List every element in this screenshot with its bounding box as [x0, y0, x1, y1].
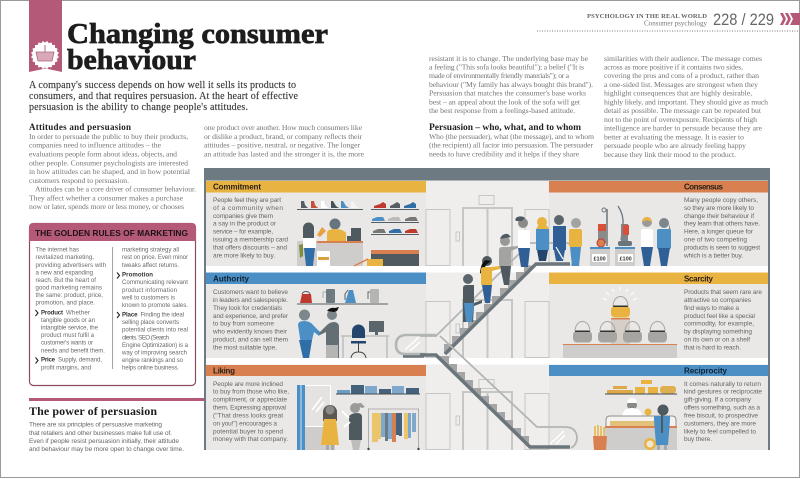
text column 3: a feeling ("This sofa looks beautiful"); a belief ("It is [429, 62, 584, 72]
rules right column [117, 246, 189, 372]
rules left column: promotion, and place. [36, 300, 95, 307]
highlighted yellow kettle [603, 287, 637, 318]
golden rules heading: THE GOLDEN RULES OF MARKETING [35, 228, 188, 238]
text column 4: intelligence are harder to persuade because they are [604, 124, 763, 133]
person in queue 7 [569, 218, 582, 266]
queue person white top [641, 217, 653, 266]
rules right column: Finding the ideal [140, 312, 184, 318]
gift basket [644, 438, 656, 450]
text column 4: covering the pros and cons of a product, rather than [604, 71, 759, 80]
rules right column: helps online business. [122, 365, 179, 372]
cash register [347, 228, 361, 241]
rules left column: Product [41, 309, 63, 316]
text: scarcity: attractive so companies [684, 297, 752, 304]
text: commitment: companies give them [213, 213, 273, 220]
person on escalator 3 [499, 234, 518, 285]
vacuum cleaner on plinth 2: £100 [620, 256, 632, 262]
heading: consensus: Consensus [684, 182, 724, 192]
rules left column: Price [41, 357, 56, 364]
text column 3: best – an appeal about the look of the sofa will get [429, 98, 581, 106]
panel: golden rules of marketing [29, 223, 196, 386]
text column 1: attitudes and persuasion: other people. Consumer psychologists are interested [29, 158, 188, 167]
heading: liking: Liking [213, 366, 235, 376]
text: commitment: that offers discounts – and [213, 244, 287, 252]
rules left column: needs and benefit them. [41, 347, 105, 354]
text column 4: not to the point of overexposure. Recipients of high [604, 115, 757, 124]
heading: scarcity: Scarcity [684, 274, 714, 284]
text column 1: attitudes and persuasion [29, 122, 196, 211]
lower escalator [420, 336, 577, 448]
text column 3: (the recipient) all factor into persuasion. The persuader [429, 141, 593, 150]
intro text: persuasion is the ability to change people's attitudes. [29, 102, 248, 113]
illustration: clothes shop [297, 385, 420, 450]
text: commitment: service – for example, [213, 229, 273, 236]
rules right column: potential clients into real [122, 327, 188, 334]
heading: consensus [549, 181, 768, 192]
text: commitment: issuing a membership card [213, 236, 288, 244]
rules left column: The internet has [36, 246, 79, 254]
text: scarcity [684, 289, 762, 352]
running header: 228 / 229 [713, 10, 774, 29]
text column 1: attitudes and persuasion: Attitudes and persuasion [29, 122, 131, 132]
text column 1: attitudes and persuasion: companies need to influence attitudes – the [29, 141, 162, 150]
rules right column: Promotion [122, 272, 153, 278]
text column 1: attitudes and persuasion: evaluations people form about ideas, objects, and [29, 150, 177, 158]
central lift lobby background [426, 196, 549, 450]
text column 4: a one-sided list. Messages are strongest when they [604, 80, 758, 89]
text: authority: Customers want to believe [213, 289, 288, 296]
rules left column: customer's wants or [41, 340, 93, 347]
text column 3: the best response from a feelings-based attitude. [429, 106, 575, 115]
rules right column: way of improving search [121, 350, 187, 356]
text: reciprocity: likely to feel compelled to [684, 428, 756, 435]
text: consensus: Here, a longer queue for [684, 229, 754, 236]
running header: PSYCHOLOGY IN THE REAL WORLD [587, 13, 707, 20]
text: consensus: one of two competing [684, 236, 747, 244]
text column 3: Persuasion – who, what, and to whom [429, 123, 581, 133]
display table [563, 344, 677, 358]
bakery counter [605, 408, 677, 450]
rules right column: clients. SEO (Search [122, 334, 169, 341]
person on escalator 4 [515, 216, 530, 267]
rules right column: Engine Optimization) is a [122, 342, 189, 349]
text column 3: Persuasion that matches the consumer's base works [429, 89, 586, 98]
rules left column: Whether [66, 309, 90, 316]
rules left column: revitalized marketing, [36, 254, 94, 261]
heading: reciprocity [549, 365, 768, 376]
shop counter [297, 241, 363, 266]
title: behaviour [67, 45, 196, 76]
illustration: kettles on display [563, 287, 677, 358]
rules right column: known to promote sales. [122, 302, 188, 309]
text column 2: or dislike a product, brand, or company reflects their [204, 132, 362, 141]
text: authority: and experience, and prefer [213, 313, 289, 320]
text: authority: They look for credentials [213, 305, 283, 312]
text: commitment [213, 197, 288, 260]
rules left column: Supply, demand, [58, 357, 102, 364]
text: consensus: which is a better buy. [683, 252, 743, 260]
rules left column: the same: product, price, [36, 292, 103, 299]
section: the power of persuasion [29, 398, 204, 453]
title [67, 19, 328, 76]
person in queue 5 [536, 217, 549, 261]
text column 3: made of environmentally friendly materials"); or a [429, 71, 570, 80]
text: commitment: of a community when [213, 205, 283, 212]
person on escalator 1 [463, 274, 482, 322]
text: consensus: they learn that others have. [684, 221, 760, 228]
heading: commitment [206, 181, 426, 192]
clothes rack [367, 409, 420, 450]
upper escalator [396, 243, 577, 356]
text: reciprocity: It comes naturally to return [684, 381, 761, 388]
text: consensus: so they are more likely to [684, 205, 754, 212]
intro text: consumers, and that requires persuasion. At the heart of effective [29, 91, 299, 102]
panel: six principles infographic [204, 168, 770, 450]
text: liking: People are more inclined [213, 381, 283, 388]
rules left column: reach. But the heart of [36, 277, 96, 284]
text column 1: attitudes and persuasion: customers respond to persuasion. [29, 176, 129, 185]
shoe bench [354, 250, 419, 266]
text: authority [212, 289, 289, 352]
running header: Consumer psychology [644, 20, 708, 28]
rules left column: tangible goods or an [41, 317, 95, 324]
illustration: bakery [593, 380, 677, 450]
text: consensus: products is seen to suggest [684, 244, 760, 252]
text column 3 [429, 54, 594, 158]
shopping bag [317, 251, 330, 266]
text: scarcity: commodity, for example, [684, 321, 754, 328]
text: authority: the most suitable type. [213, 344, 277, 352]
customer in blue dress [654, 404, 670, 450]
rules right column: marketing strategy all [122, 246, 179, 254]
text column 3: needs to have credibility and it helps if they share [429, 150, 580, 158]
text: liking: ("That dress looks great [213, 412, 283, 419]
text: reciprocity: gift-giving. If a company [684, 397, 752, 404]
intro text [29, 80, 299, 113]
text: liking: money with that company. [213, 436, 288, 443]
grey kettles [573, 322, 667, 342]
rules left column [36, 246, 106, 371]
text: reciprocity: buy there. [684, 436, 712, 443]
text column 1: attitudes and persuasion: now or later, spends more or less money, or chooses [29, 202, 184, 211]
text column 1: attitudes and persuasion: They affect whether a consumer makes a purchase [29, 193, 184, 202]
changing room [297, 385, 335, 450]
heading: commitment: Commitment [213, 182, 261, 192]
shoe shelves [297, 201, 419, 234]
golden rules heading [29, 223, 196, 241]
text column 4: highly likely, and important. They should give as much [604, 98, 768, 106]
text: scarcity: find ways to make a [684, 305, 739, 312]
text column 1: attitudes and persuasion: in how attitudes can be shaped, and in how potential [29, 167, 190, 176]
text column 4: highlight consequences that are highly desirable, [604, 89, 752, 98]
section: the power of persuasion: There are six principles of persuasive marketing [29, 422, 162, 428]
text: scarcity: by displaying something [684, 329, 752, 336]
text column 4: detail as possible. The message can be repeated but [604, 106, 762, 115]
running header [587, 10, 774, 29]
section: the power of persuasion: that retailers and other businesses make full use of. [29, 430, 172, 437]
icon: chevrons [780, 13, 800, 25]
text column 4: across as more positive if it contains two sides, [604, 62, 743, 72]
text: consensus [683, 197, 760, 260]
text column 2: attitudes – positive, neutral, or negative. The longer [204, 141, 360, 150]
text column 2: one product over another. How much consumers like [204, 123, 363, 132]
heading: authority: Authority [213, 274, 250, 284]
person in queue 6 [553, 215, 566, 261]
text: commitment: People feel they are part [213, 197, 281, 204]
rules right column: tweaks affect returns. [122, 262, 179, 269]
customer in grey [319, 307, 339, 358]
heading: reciprocity: Reciprocity [684, 366, 728, 376]
text: authority: to buy from someone [213, 321, 274, 328]
text: liking: to buy from those who like, [213, 389, 289, 396]
section: the power of persuasion: and behaviour may be more open to change over time. [29, 446, 184, 453]
text: liking: them. Expressing approval [213, 404, 287, 412]
icon: starburst basket [31, 41, 59, 69]
text: liking: on you!") encourages a [213, 420, 277, 427]
rules left column: product must fulfil a [41, 332, 95, 339]
rules right column: engine rankings and so [122, 357, 184, 364]
woman in yellow dress [321, 405, 339, 450]
rules right column: selling place converts [122, 319, 179, 326]
text column 3: behaviour ("My family has always bought this brand"). [429, 80, 593, 89]
text column 1: attitudes and persuasion: Attitudes can be a core driver of consumer behaviour. [35, 184, 196, 194]
text: reciprocity: free biscuit, to prospective [684, 412, 758, 419]
text: scarcity: that is hard to reach. [684, 344, 741, 352]
text: reciprocity [684, 381, 762, 443]
section: the power of persuasion: Even if people resist persuasion initially, their attitude [29, 438, 179, 445]
bakery shelf with cakes [605, 380, 677, 394]
rules right column: rest on price. Even minor [122, 254, 188, 261]
text column 3: Who (the persuader), what (the message), and to whom [429, 132, 594, 141]
text column 4 [604, 54, 768, 159]
text column 4: persuade people who are already feeling happy [604, 141, 746, 150]
text column 3: resistant it is to change. The underlying base may be [429, 54, 589, 63]
sales assistant [342, 403, 365, 450]
section: the power of persuasion: The power of persuasion [29, 404, 157, 418]
text: consensus: change their behaviour if [684, 213, 754, 220]
desk and computer [341, 321, 389, 358]
heading: liking [206, 365, 426, 376]
rules left column: good marketing remains [36, 284, 102, 291]
escalators [396, 215, 582, 448]
rules right column: Place [122, 312, 138, 318]
text: commitment: a say in the product or [213, 221, 277, 228]
text: consensus: Many people copy others, [684, 197, 758, 204]
text column 4: because they link their mood to the product. [604, 150, 736, 159]
person on escalator 2 [480, 256, 500, 303]
kettles on shelf [300, 289, 379, 303]
heading: scarcity [549, 272, 768, 284]
rules right column: well to customers is [121, 294, 175, 301]
text: commitment: are more likely to buy. [213, 252, 275, 260]
title: Changing consumer [67, 19, 328, 50]
salesperson in blue [298, 310, 321, 358]
vacuum cleaner on plinth 1: £100 [594, 256, 606, 262]
heading: authority [206, 272, 426, 284]
text: reciprocity: offers something, such as a [684, 404, 760, 412]
text: scarcity: on its own or on a shelf [684, 336, 750, 344]
text: reciprocity: kind gestures or reciprocate [684, 389, 762, 396]
baker [622, 398, 642, 416]
illustration: kettle shop with salespeople [297, 289, 389, 358]
text: authority: product, and can sell them [213, 336, 288, 344]
folded clothes shelf [336, 385, 420, 394]
text column 2: an attitude has lasted and the stronger it is, the more [204, 150, 365, 158]
illustration: vacuum cleaners and queue [590, 206, 671, 266]
salesperson [327, 218, 346, 241]
text column 2 [204, 123, 365, 158]
text column 4: similarities with their audience. The message comes [604, 54, 762, 63]
text: scarcity: product feel like a special [684, 313, 756, 320]
cup of breadsticks [593, 425, 607, 450]
intro text: A company's success depends on how well it sells its products to [29, 80, 296, 91]
rules left column: intangible service, the [41, 324, 99, 331]
text: liking [213, 381, 289, 443]
text: scarcity: Products that seem rare are [684, 289, 762, 296]
rules left column: a new and expanding [36, 269, 93, 276]
text: reciprocity: customers, they are more [684, 420, 756, 427]
queue person blue top [657, 218, 671, 266]
rules left column: providing advertisers with [36, 262, 106, 269]
rules right column: Communicating relevant [122, 279, 188, 286]
text: liking: potential buyer to spend [213, 428, 283, 435]
text: authority: who evidently knows their [212, 329, 288, 336]
illustration: shoe shop [297, 201, 419, 266]
text column 1: attitudes and persuasion: In order to persuade the public to buy their products, [29, 132, 188, 141]
text column 4: better at evaluating the message. It is easier to [604, 132, 744, 142]
rules left column: profit margins, and [41, 364, 91, 371]
text: authority: in leaders and salespeople. [213, 297, 288, 304]
customer [299, 223, 326, 266]
text: liking: compliment, or appreciate [213, 397, 287, 404]
rules right column: product information [122, 287, 177, 294]
ribbon with basket icon [29, 0, 62, 72]
